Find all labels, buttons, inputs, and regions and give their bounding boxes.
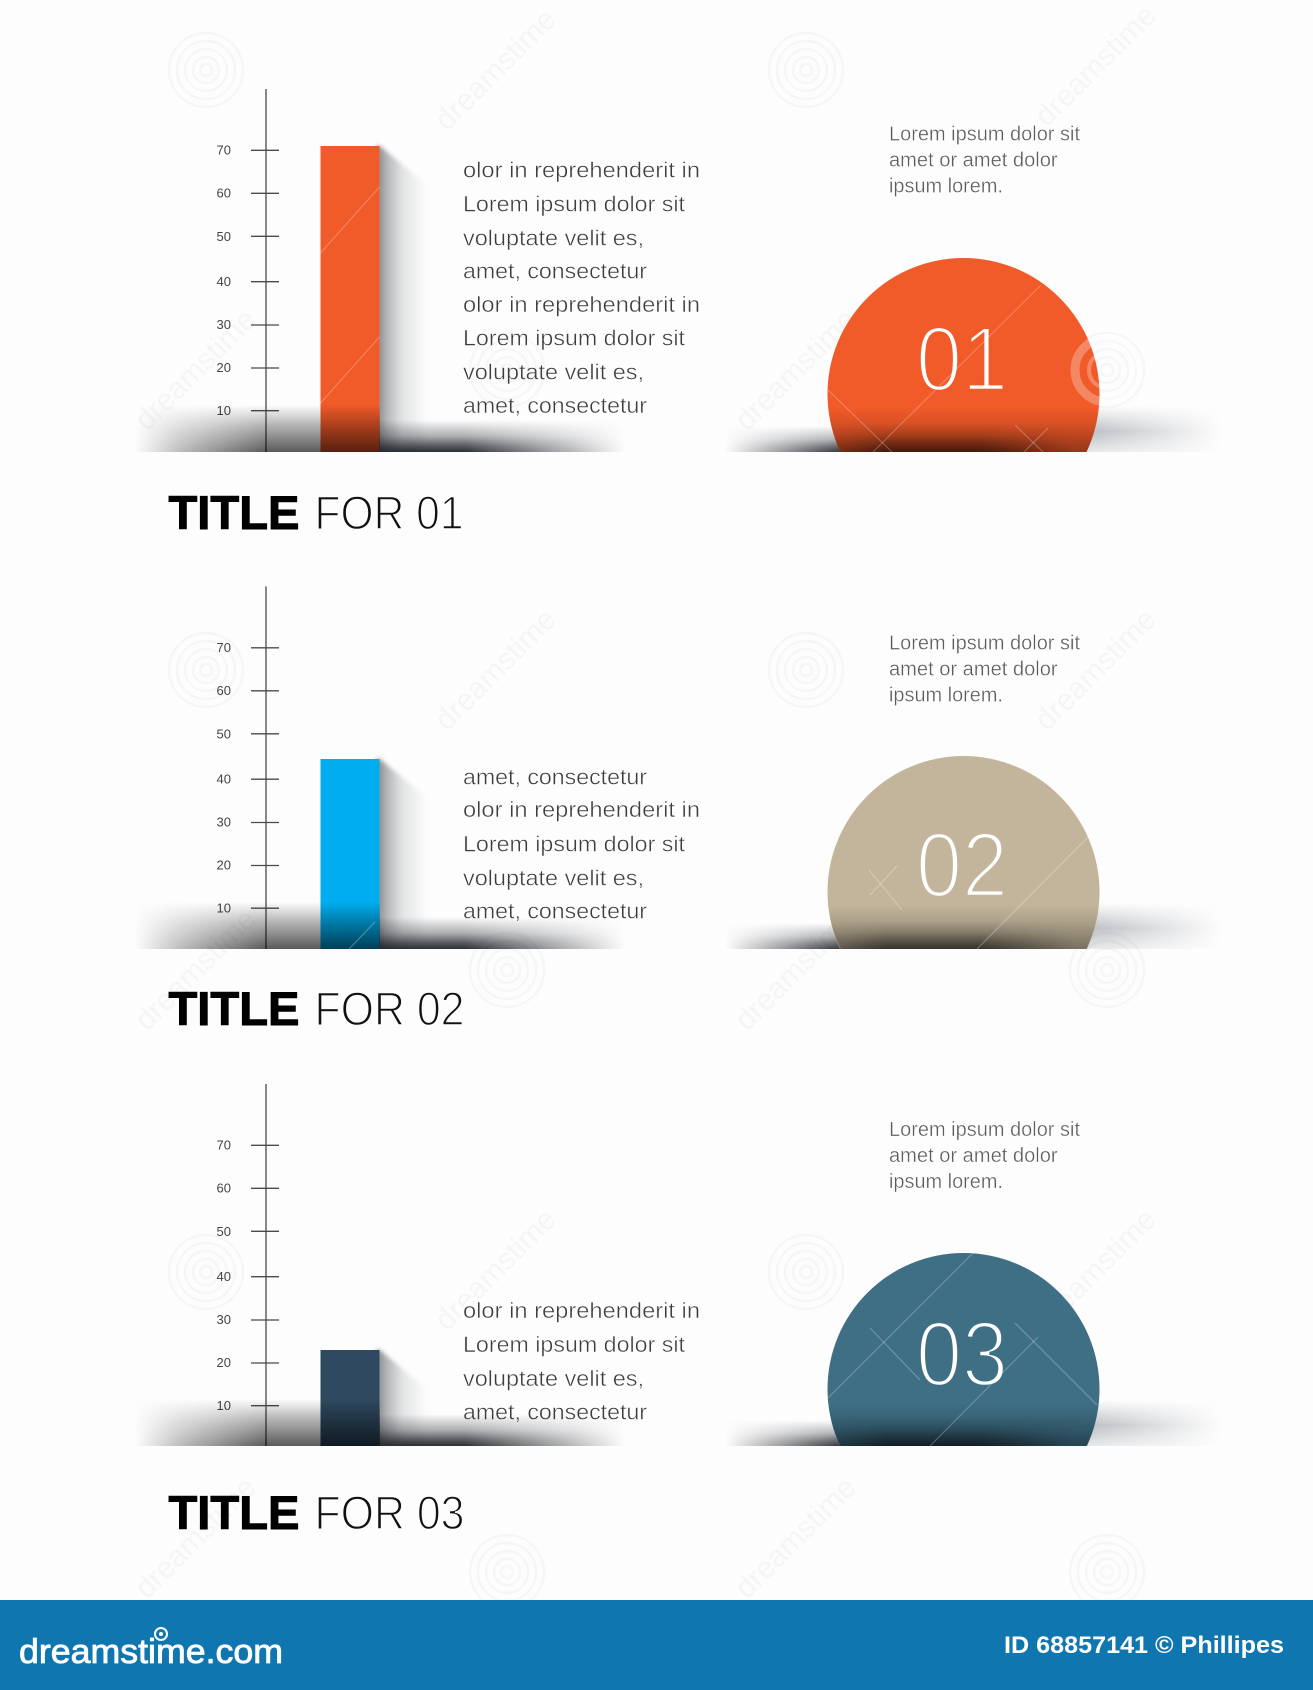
body text 02: amet, consectetur [463,765,647,790]
watermark lines on 02 [349,835,1090,949]
side note 01: Lorem ipsum dolor sit [889,123,1080,146]
body text 01: Lorem ipsum dolor sit [463,326,685,351]
axis with tick labels 02: 10 [216,900,231,916]
axis with tick labels 03: 50 [216,1224,231,1239]
bar 02 [320,759,380,949]
body text 01: voluptate velit es, [463,360,644,385]
axis with tick labels 03: 10 [216,1398,231,1413]
title 02: TITLE [168,982,300,1035]
side note 03 [889,1118,1080,1193]
watermark pattern: dreamstime [1029,1203,1163,1337]
side note 03: Lorem ipsum dolor sit [889,1118,1080,1141]
axis with tick labels 01: 10 [216,403,231,418]
watermark pattern: dreamstime [129,903,263,1037]
axis with tick labels 02: 70 [216,640,231,655]
axis with tick labels 02: 50 [216,726,231,742]
number 01: 01 [916,309,1008,411]
body text 02: Lorem ipsum dolor sit [463,832,685,856]
axis with tick labels 03: 70 [216,1138,231,1152]
watermark pattern: dreamstime [429,603,563,737]
axis with tick labels 01: 50 [216,229,231,244]
bar shadow 01 [374,144,420,451]
watermark pattern: dreamstime [729,1471,863,1605]
axis with tick labels 02: 60 [216,683,231,698]
side ground shadows 03 [700,1400,1230,1446]
panel: section 02 [130,586,1230,1035]
body text 03 [463,1298,700,1424]
footer logo: dreamstime.com [19,1633,283,1671]
axis with tick labels 03: 60 [216,1180,231,1196]
title 03: TITLE [168,1486,300,1539]
axis with tick labels 03: 30 [216,1312,231,1327]
body text 01 [463,158,700,418]
watermark pattern: dreamstime [729,303,863,437]
bar 01 [320,146,380,452]
body text 02 [463,765,700,924]
body text 03: Lorem ipsum dolor sit [463,1332,685,1357]
axis with tick labels 01 [216,89,279,452]
watermark pattern: dreamstime [129,1471,263,1605]
side note 03: ipsum lorem. [889,1170,1003,1193]
bar shadow 02 [374,756,420,948]
watermark pattern: dreamstime [429,3,563,137]
watermark lines on 03 [828,1253,1097,1446]
body text 02: voluptate velit es, [463,866,644,890]
title 03 [168,1486,464,1539]
side note 02: ipsum lorem. [889,684,1003,707]
ground shadow 03 [130,1399,1105,1446]
ground shadow 01 [130,405,1105,452]
body text 03: olor in reprehenderit in [463,1298,700,1323]
axis with tick labels 03 [216,1084,279,1446]
footer credit: ID 68857141 © Phillipes [1004,1632,1284,1659]
watermark pattern: dreamstime [429,1203,563,1337]
side note 03: amet or amet dolor [889,1144,1058,1167]
body text 02: amet, consectetur [463,898,647,924]
circle 02 [828,756,1100,949]
panel: section 01 [130,89,1230,539]
side ground shadows 01 [700,406,1230,452]
panel: section 03 [130,1084,1230,1539]
footer bar [0,1600,1313,1690]
circle 01 [828,258,1100,452]
axis with tick labels 02: 20 [216,858,231,872]
bar 03 [320,1350,380,1446]
body text 02: olor in reprehenderit in [463,797,700,822]
side ground shadows 02 [700,903,1230,949]
body text 01: olor in reprehenderit in [463,158,700,183]
title 03: FOR 03 [314,1486,464,1539]
watermark pattern [129,0,1163,1609]
title 01: TITLE [168,486,300,539]
side note 02 [889,632,1080,707]
title 01 [168,486,464,539]
axis with tick labels 01: 30 [216,317,231,332]
number 02: 02 [916,814,1008,916]
number 03: 03 [916,1304,1008,1406]
bar shadow 03 [374,1348,420,1445]
side note 01: amet or amet dolor [889,149,1058,172]
watermark lines on 01 [320,187,1139,452]
body text 01: voluptate velit es, [463,225,644,250]
watermark pattern: dreamstime [729,903,863,1037]
watermark pattern: dreamstime [1029,603,1163,737]
title 02: FOR 02 [314,982,464,1035]
axis with tick labels 01: 60 [216,186,231,200]
body text 03: voluptate velit es, [463,1366,644,1391]
axis with tick labels 02: 30 [216,814,231,830]
side note 02: Lorem ipsum dolor sit [889,632,1080,655]
side note 02: amet or amet dolor [889,658,1058,681]
axis with tick labels 02 [216,586,279,949]
title 02 [168,982,464,1035]
body text 01: Lorem ipsum dolor sit [463,191,685,216]
body text 01: amet, consectetur [463,259,647,284]
title 01: FOR 01 [314,486,464,539]
axis with tick labels 01: 20 [216,360,231,375]
body text 03: amet, consectetur [463,1400,647,1424]
axis with tick labels 03: 40 [216,1269,231,1284]
axis with tick labels 01: 40 [216,274,231,289]
axis with tick labels 01: 70 [216,142,231,158]
body text 01: olor in reprehenderit in [463,292,700,317]
axis with tick labels 02: 40 [216,772,231,786]
watermark pattern: dreamstime [129,303,263,437]
ground shadow 02 [130,902,1105,949]
axis with tick labels 03: 20 [216,1355,231,1370]
circle 03 [828,1253,1100,1446]
side note 01: ipsum lorem. [889,175,1003,198]
side note 01 [889,123,1080,198]
watermark pattern: dreamstime [1029,0,1163,133]
body text 01: amet, consectetur [463,393,647,418]
